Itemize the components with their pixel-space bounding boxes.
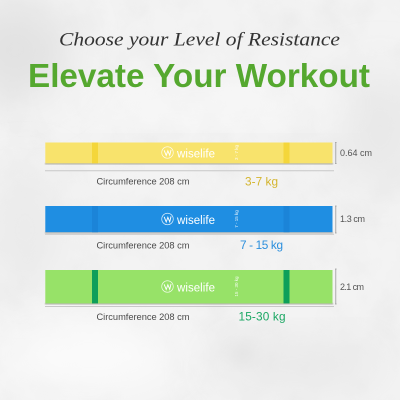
band: blue	[45, 206, 333, 233]
band: green: wiselife	[176, 282, 215, 294]
circumference label: green: Circumference 208 cm	[96, 312, 190, 322]
band: green	[45, 270, 333, 304]
band: yellow	[45, 142, 333, 164]
resistance label: blue: 7 - 15 kg	[240, 238, 283, 252]
resistance label: yellow: 3-7 kg	[245, 174, 278, 188]
band: green: 15 - 30 kg	[234, 276, 239, 297]
circumference line: yellow	[45, 170, 334, 172]
circumference line: blue	[45, 233, 334, 235]
thickness dimension: blue	[335, 206, 365, 233]
band: blue: wiselife	[176, 215, 215, 227]
panel: green band 15-30 kg	[45, 269, 364, 324]
panel: blue band 7-15 kg	[45, 206, 365, 252]
panel: yellow band 3-7 kg	[45, 142, 372, 188]
thickness dimension: yellow	[335, 142, 372, 164]
thickness dimension: green	[335, 269, 364, 304]
band: blue: 7 - 15 kg	[234, 210, 239, 228]
thickness dimension: yellow: 0.64 cm	[340, 148, 372, 158]
title: Elevate Your Workout	[28, 58, 370, 95]
band: yellow: wiselife	[176, 148, 215, 160]
circumference label: blue: Circumference 208 cm	[96, 240, 190, 250]
thickness dimension: blue: 1.3 cm	[340, 214, 365, 224]
thickness dimension: green: 2.1 cm	[340, 282, 364, 292]
resistance label: green: 15-30 kg	[238, 310, 286, 324]
band: yellow: 3 - 7 kg	[234, 145, 239, 160]
circumference label: yellow: Circumference 208 cm	[96, 176, 190, 186]
circumference line: green	[45, 306, 334, 308]
subtitle: script line: Choose your Level of Resistance	[59, 30, 340, 50]
